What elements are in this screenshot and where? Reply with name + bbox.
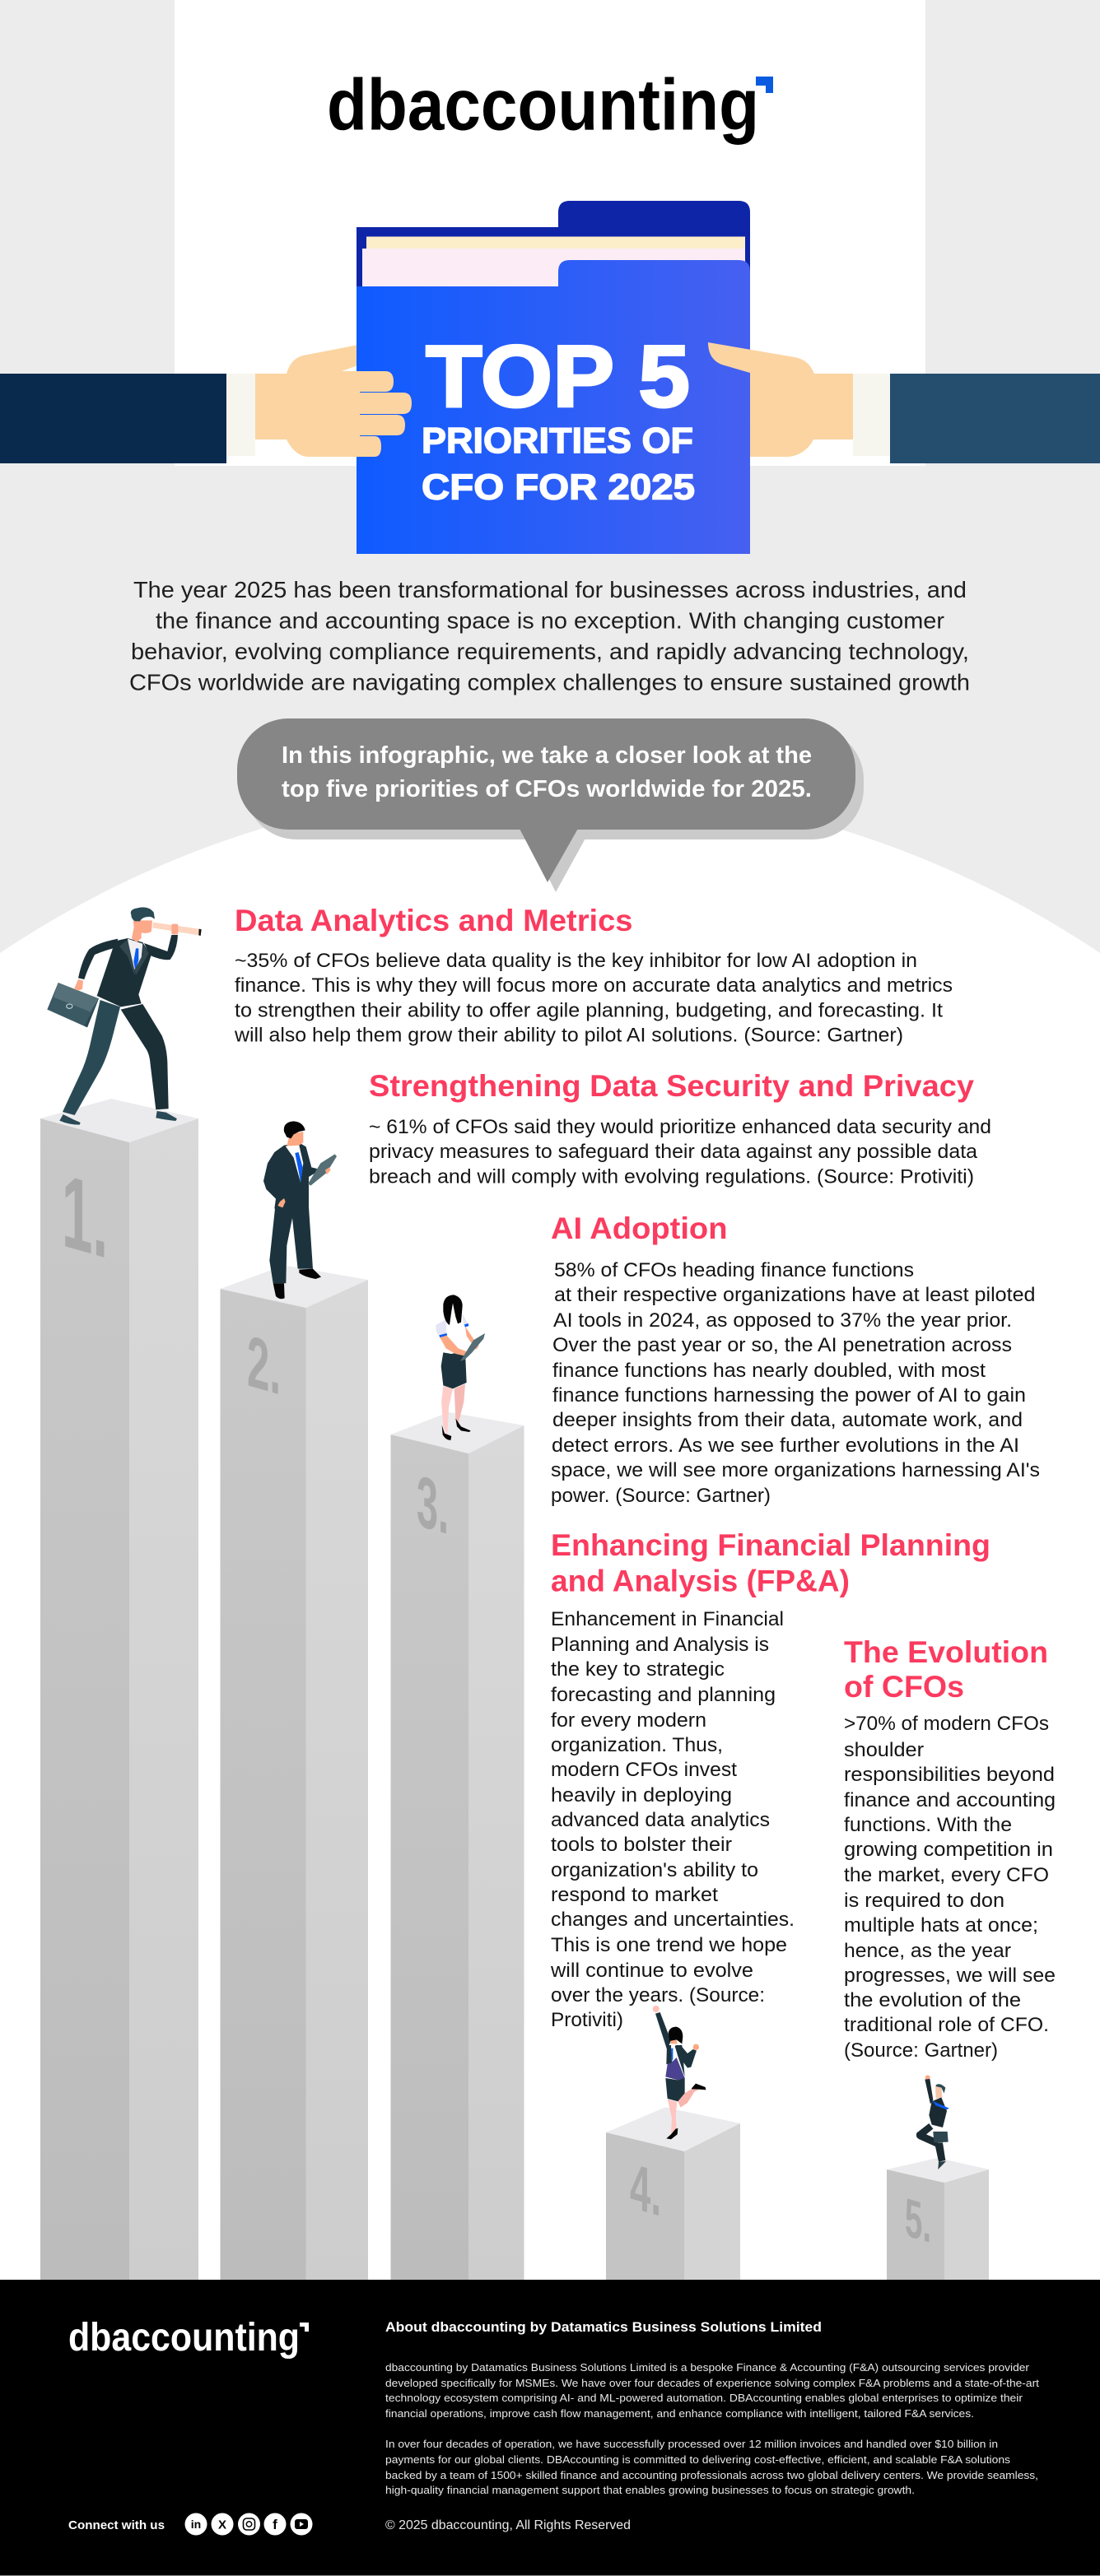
body: hence, as the year	[844, 1940, 1011, 1962]
body	[369, 1116, 991, 1188]
about heading: About dbaccounting by Datamatics Business Solutions Limited	[385, 2320, 822, 2335]
figure: woman jumping	[653, 2006, 706, 2139]
left hand back	[255, 344, 362, 457]
body: finance functions has nearly doubled, with most	[552, 1360, 986, 1382]
pillar 2: 2.	[247, 1321, 281, 1411]
heading: of CFOs	[844, 1670, 964, 1704]
body: deeper insights from their data, automate work, and	[552, 1409, 1023, 1431]
body: (Source: Gartner)	[844, 2039, 998, 2062]
about paragraph 1	[385, 2362, 1040, 2420]
body: over the years. (Source:	[551, 1984, 765, 2006]
heading: The Evolution	[844, 1635, 1048, 1669]
body: detect errors. As we see further evolutions in the AI	[552, 1434, 1019, 1457]
body: shoulder	[844, 1739, 924, 1761]
callout speech bubble	[237, 718, 864, 892]
about paragraph 1: dbaccounting by Datamatics Business Solutions Limited is a bespoke Finance & Accounting (F&A) outsourcing services provider	[385, 2362, 1029, 2374]
intro text: The year 2025 has been transformational for businesses across industries, and	[133, 577, 967, 602]
body: Enhancement in Financial	[551, 1608, 784, 1630]
section 3: ai adoption	[551, 1211, 1040, 1507]
body: finance functions harnessing the power of AI to gain	[552, 1384, 1026, 1407]
copyright: © 2025 dbaccounting, All Rights Reserved	[385, 2518, 631, 2532]
body	[550, 1608, 795, 2031]
right sleeve	[853, 374, 1100, 463]
intro text	[129, 577, 970, 695]
social icons: in	[191, 2518, 201, 2531]
pillar 4	[606, 2107, 740, 2280]
about paragraph 1: technology ecosystem comprising AI- and ML-powered automation. DBAccounting enables global enterprises to optimize their	[385, 2392, 1023, 2404]
body: progresses, we will see	[844, 1965, 1056, 1987]
body: traditional role of CFO.	[844, 2014, 1049, 2036]
intro text: CFOs worldwide are navigating complex challenges to ensure sustained growth	[129, 670, 970, 695]
illustration: hands holding folder with title	[0, 201, 1100, 554]
title: priorities of: PRIORITIES OF	[422, 421, 693, 461]
heading: Strengthening Data Security and Privacy	[369, 1069, 974, 1103]
figure: man with tablet	[263, 1121, 337, 1299]
heading: AI Adoption	[551, 1211, 728, 1245]
body: organization's ability to	[551, 1859, 758, 1881]
about paragraph 2: high-quality financial management support that enables growing businesses to focus on strategic growth.	[385, 2485, 915, 2496]
heading	[551, 1528, 990, 1598]
body: Planning and Analysis is	[551, 1634, 769, 1656]
body: power. (Source: Gartner)	[551, 1485, 771, 1507]
body: changes and uncertainties.	[551, 1909, 795, 1931]
body: >70% of modern CFOs	[844, 1713, 1049, 1735]
body: heavily in deploying	[551, 1784, 732, 1806]
body: organization. Thus,	[551, 1734, 723, 1756]
intro text: the finance and accounting space is no exception. With changing customer	[156, 607, 944, 634]
body: This is one trend we hope	[551, 1934, 787, 1956]
body: ~ 61% of CFOs said they would prioritize enhanced data security and	[369, 1116, 991, 1138]
title: cfo for 2025: CFO FOR 2025	[422, 467, 695, 507]
pillar 3	[390, 1412, 524, 2280]
social icons: f	[273, 2517, 277, 2532]
body: the market, every CFO	[844, 1864, 1049, 1886]
heading	[844, 1635, 1048, 1704]
figure: woman with tablet	[436, 1295, 485, 1440]
body: 58% of CFOs heading finance functions	[554, 1259, 914, 1281]
right hand	[708, 342, 853, 457]
section 4: enhancing financial planning and analysis	[550, 1528, 990, 2031]
body: to strengthen their ability to offer agile planning, budgeting, and forecasting. It	[235, 999, 943, 1022]
body: the evolution of the	[844, 1989, 1021, 2011]
connect label: Connect with us	[68, 2518, 165, 2532]
pillar 1: 1.	[62, 1153, 108, 1281]
callout speech bubble: In this infographic, we take a closer look at the	[282, 742, 812, 769]
about paragraph 2	[385, 2439, 1038, 2496]
body: growing competition in	[844, 1839, 1053, 1861]
logo: dbaccounting: dbaccounting	[327, 64, 759, 145]
body	[844, 1713, 1056, 2062]
body: respond to market	[551, 1884, 718, 1906]
body: multiple hats at once;	[844, 1914, 1038, 1937]
body	[234, 950, 953, 1047]
body: breach and will comply with evolving regulations. (Source: Protiviti)	[369, 1165, 974, 1188]
section 5: the evolution of cfos	[844, 1635, 1056, 2062]
social icons	[184, 2513, 313, 2535]
body	[551, 1259, 1040, 1507]
body: ~35% of CFOs believe data quality is the key inhibitor for low AI adoption in	[235, 950, 917, 972]
body: responsibilities beyond	[844, 1764, 1055, 1786]
pillar 5	[887, 2158, 989, 2280]
body: AI tools in 2024, as opposed to 37% the year prior.	[553, 1309, 1012, 1332]
body: will also help them grow their ability to pilot AI solutions. (Source: Gartner)	[234, 1024, 903, 1047]
left hand fingers	[342, 371, 412, 457]
about paragraph 2: payments for our global clients. DBAccounting is committed to delivering cost-effective, efficient, and scalable F&A solutions	[385, 2454, 1010, 2466]
about paragraph 2: In over four decades of operation, we have successfully processed over 12 million invoices and handled over $10 billion in	[385, 2439, 998, 2450]
folder front	[357, 260, 750, 554]
figure: man with telescope and briefcase	[47, 907, 202, 1125]
social icons: X	[218, 2518, 226, 2532]
section 1: data analytics and metrics	[234, 904, 953, 1047]
body: Protiviti)	[551, 2009, 623, 2031]
left sleeve	[0, 374, 255, 463]
title: top 5: TOP 5	[426, 327, 690, 425]
folder back	[357, 201, 750, 346]
figure: man jumping with briefcase	[916, 2075, 949, 2169]
footer logo: dbaccounting	[68, 2316, 300, 2360]
body: the key to strategic	[551, 1658, 725, 1681]
body: is required to don	[844, 1890, 1004, 1912]
section 2: strengthening data security and privacy	[369, 1069, 991, 1188]
heading: Data Analytics and Metrics	[235, 904, 632, 937]
body: will continue to evolve	[550, 1960, 753, 1982]
body: for every modern	[551, 1709, 706, 1732]
callout speech bubble: top five priorities of CFOs worldwide for 2025.	[282, 776, 812, 802]
body: Over the past year or so, the AI penetration across	[552, 1334, 1012, 1356]
about paragraph 1: developed specifically for MSMEs. We have over four decades of experience solving complex F&A problems and a state-of-the-art	[385, 2378, 1040, 2389]
body: advanced data analytics	[551, 1809, 770, 1831]
pillar 2	[221, 1266, 368, 2280]
pillar 1	[40, 1099, 198, 2280]
heading: Enhancing Financial Planning	[551, 1528, 990, 1562]
body: finance and accounting	[844, 1789, 1056, 1811]
body: modern CFOs invest	[551, 1759, 737, 1781]
pillar 4: 4.	[630, 2149, 661, 2230]
about paragraph 1: financial operations, improve cash flow management, and enhance compliance with intelligent, tailored F&A services.	[385, 2408, 974, 2420]
body: forecasting and planning	[551, 1684, 776, 1706]
body: functions. With the	[844, 1814, 1012, 1836]
body: at their respective organizations have at least piloted	[554, 1284, 1036, 1306]
intro text: behavior, evolving compliance requirements, and rapidly advancing technology,	[131, 639, 969, 664]
about paragraph 2: backed by a team of 1500+ skilled finance and accounting professionals across two global delivery centers. We provide seamless,	[385, 2470, 1038, 2481]
pillar 5: 5.	[905, 2187, 931, 2255]
folder papers	[362, 237, 745, 298]
body: privacy measures to safeguard their data against any possible data	[369, 1141, 978, 1163]
footer	[0, 2280, 1100, 2576]
pillar 3: 3.	[417, 1461, 449, 1551]
body: space, we will see more organizations harnessing AI's	[551, 1459, 1040, 1481]
body: tools to bolster their	[551, 1834, 732, 1856]
body: finance. This is why they will focus more on accurate data analytics and metrics	[235, 974, 953, 997]
heading: and Analysis (FP&A)	[551, 1564, 850, 1598]
